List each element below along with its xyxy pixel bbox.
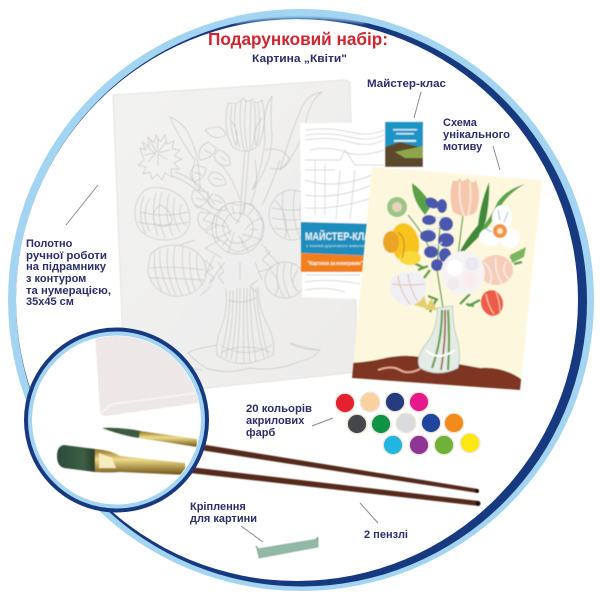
booklet title band: "Картина за номерами"	[307, 261, 363, 267]
painting: colour scheme of the motif	[350, 167, 542, 395]
label: paints: фарб	[246, 427, 275, 439]
white hydrangea	[441, 251, 485, 295]
blue hyacinth	[420, 195, 454, 271]
vase outline	[217, 287, 274, 364]
label: scheme	[443, 117, 510, 153]
label: canvas: та нумерацією,	[26, 285, 111, 297]
white daffodil	[479, 205, 520, 248]
red tulip	[480, 290, 504, 316]
label: scheme: мотиву	[443, 141, 483, 153]
booklet title band: МАЙСТЕР-КЛАС	[305, 230, 377, 243]
label: scheme: унікального	[443, 129, 510, 141]
pink tulip	[450, 178, 479, 216]
label: paints: акрилових	[246, 415, 305, 427]
canvas with numbered line art	[113, 80, 358, 396]
label: canvas: з контуром	[26, 273, 86, 285]
yellow daffodil	[383, 221, 422, 265]
label: canvas: Полотно	[26, 238, 73, 250]
thistle outline	[138, 135, 182, 180]
booklet title band	[301, 222, 377, 272]
white tulip outline	[148, 245, 206, 296]
hyacinth outline	[190, 127, 230, 230]
label: brushes: 2 пензлі	[364, 529, 408, 541]
title: Подарунковий набір:	[208, 29, 388, 49]
booklet: master class	[300, 122, 425, 300]
magnifier inset	[26, 320, 207, 510]
flat brush	[57, 445, 186, 475]
brush handles	[190, 444, 480, 506]
hanging clip	[256, 537, 318, 558]
central flowers outline	[212, 160, 315, 254]
label: canvas: 35x45 см	[26, 296, 74, 308]
paint pots: 20 acrylic colours	[335, 392, 480, 455]
label: canvas: ручної роботи	[26, 250, 107, 262]
booklet line drawing	[305, 129, 384, 292]
label: scheme: Схема	[443, 117, 478, 129]
green spiky flower	[387, 197, 407, 217]
white tulip	[390, 272, 426, 306]
label: paints	[246, 403, 312, 439]
booklet title band: з техніки дорогового живопису	[306, 243, 368, 248]
peony	[479, 247, 526, 285]
ground	[351, 355, 522, 391]
glass vase	[418, 306, 460, 373]
label: canvas: на підрамнику	[26, 261, 107, 273]
small round brush	[102, 428, 197, 447]
booklet cover thumbnail	[385, 122, 423, 167]
leaves outline	[170, 92, 322, 208]
stems and leaves	[408, 182, 525, 320]
daffodil outline	[135, 188, 190, 240]
subtitle: Картина „Квіти"	[252, 53, 347, 65]
tulip outline	[226, 98, 264, 215]
label: master class: Майстер-клас	[367, 78, 446, 90]
label: hanger: Кріплення	[190, 501, 246, 513]
label: hanger	[190, 501, 257, 525]
label: hanger: для картини	[190, 513, 257, 525]
ground outline	[145, 343, 320, 375]
leader lines	[66, 92, 500, 542]
zoomed canvas corner	[95, 336, 198, 416]
right flowers outline	[180, 149, 311, 298]
label: canvas	[26, 238, 111, 308]
label: paints: 20 кольорів	[246, 403, 312, 415]
